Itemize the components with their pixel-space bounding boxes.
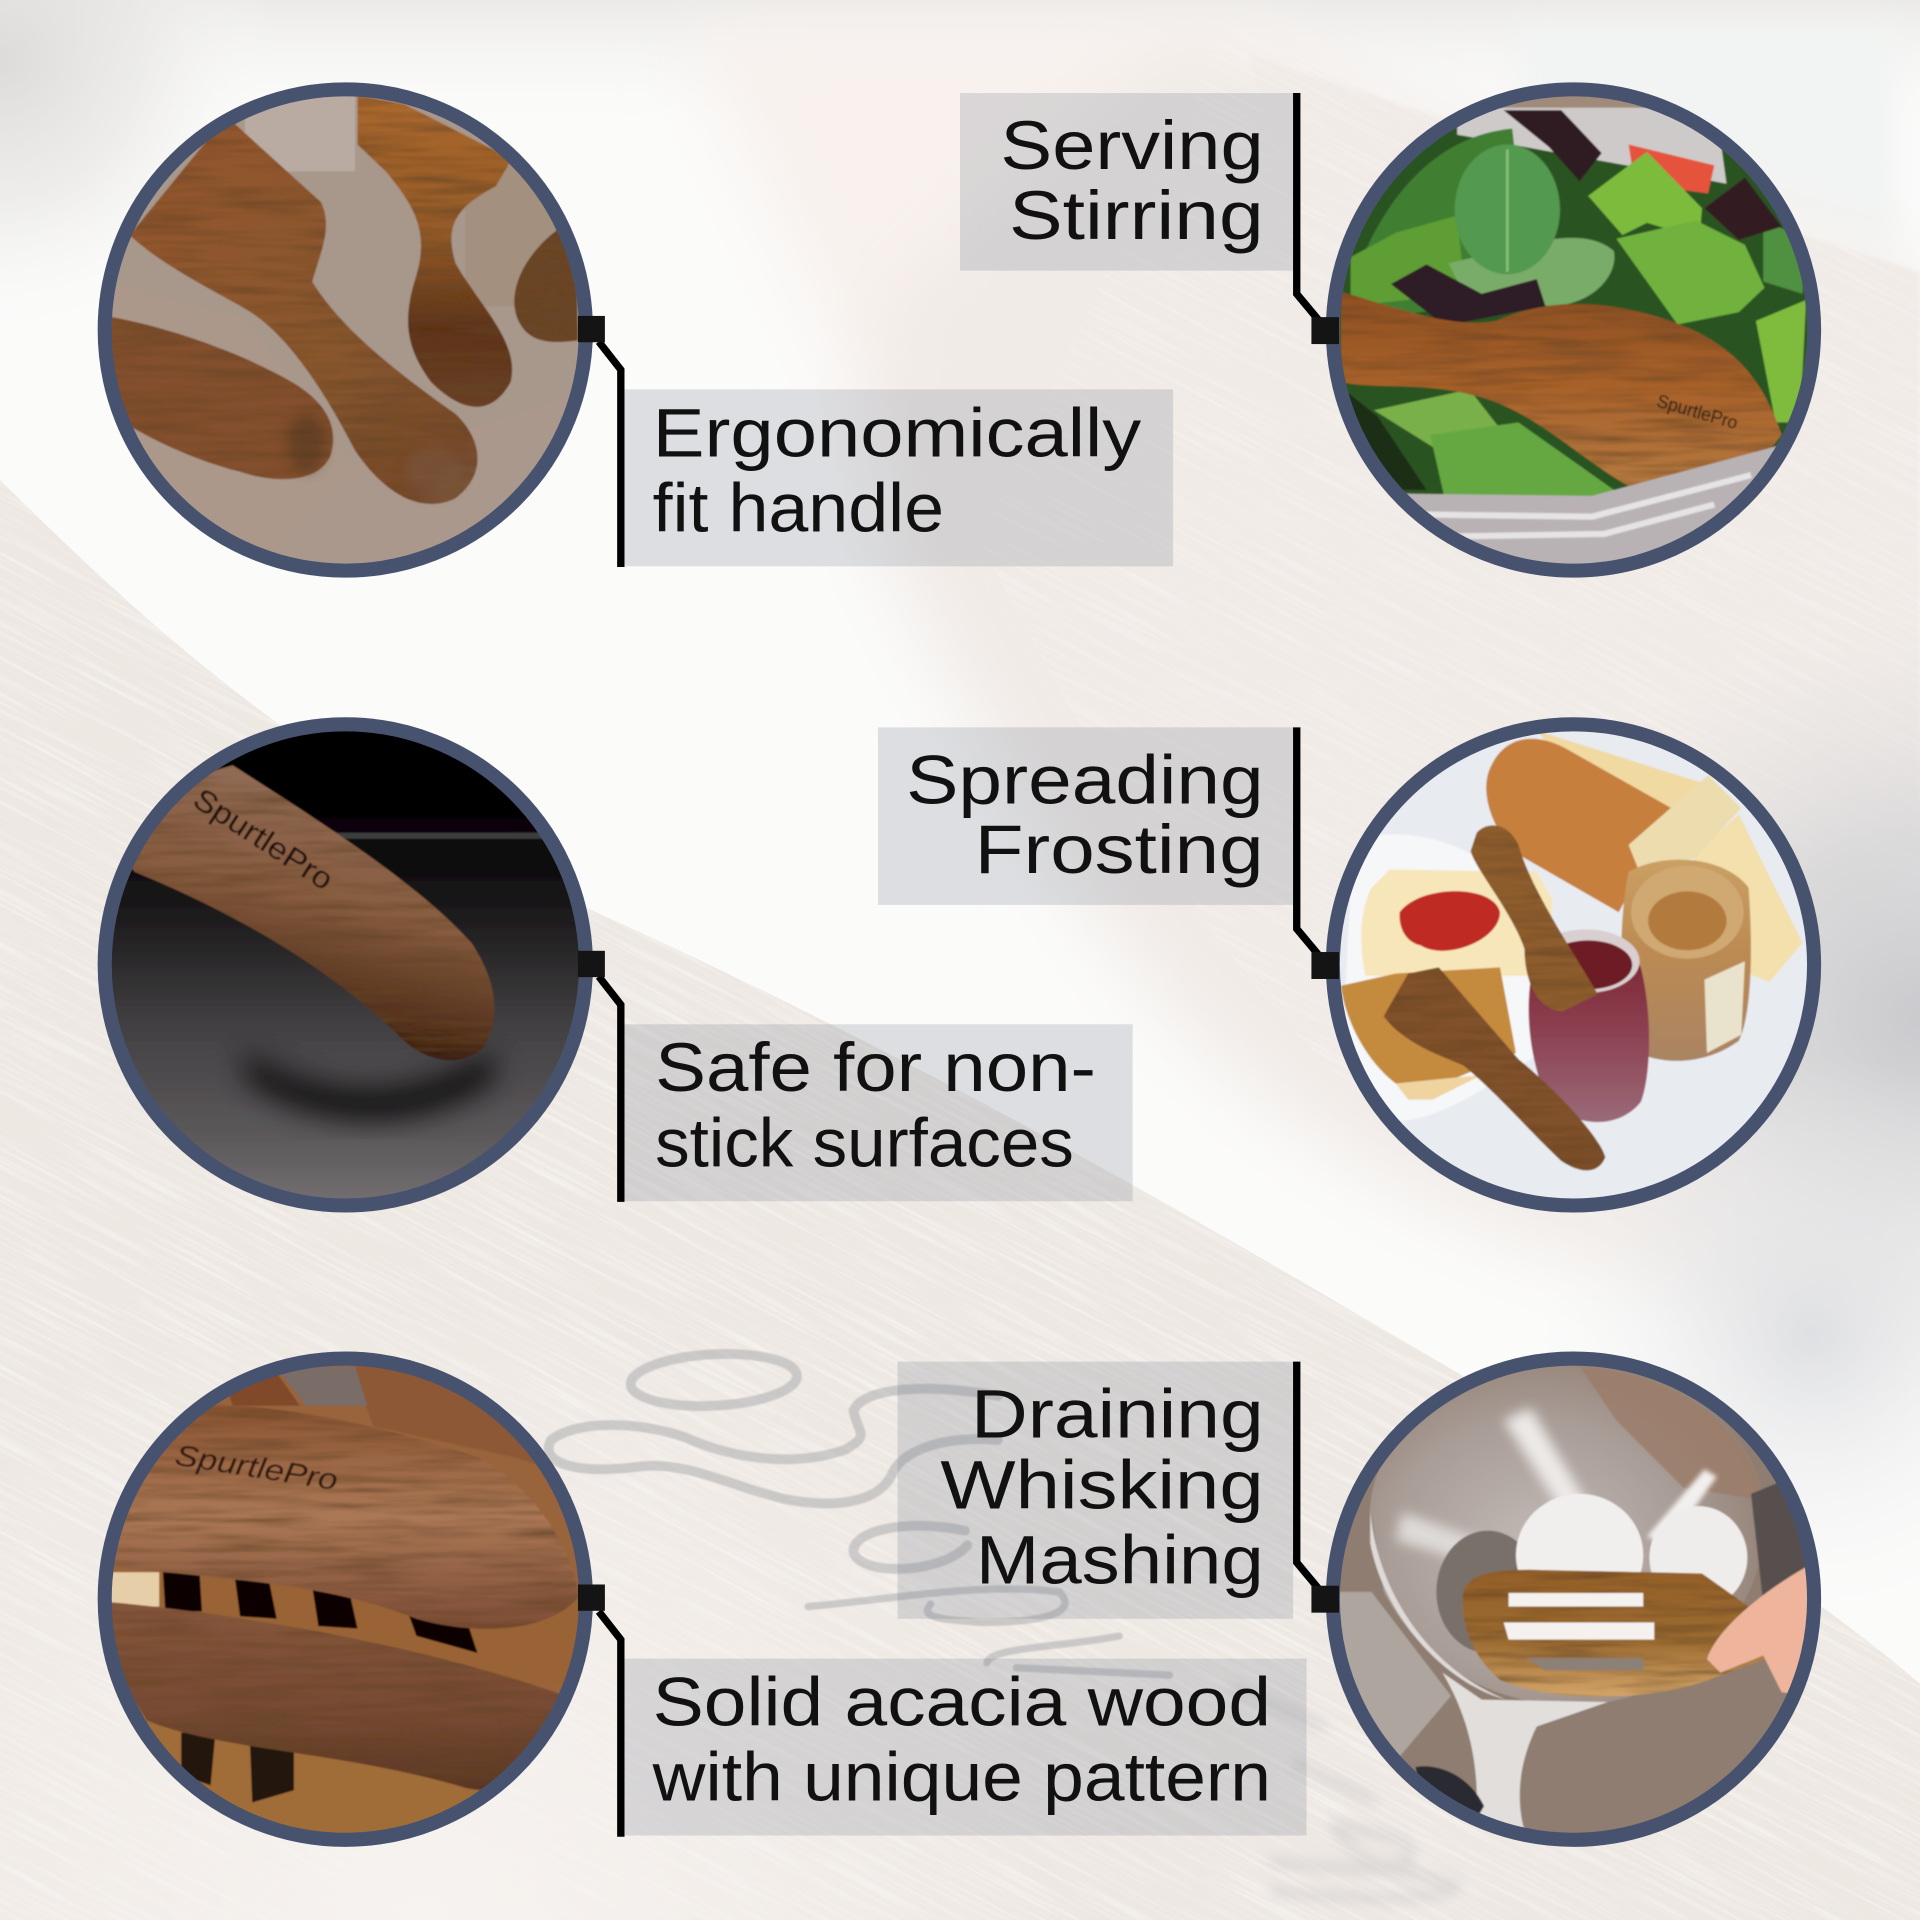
label box [898, 1362, 1293, 1619]
label box [878, 727, 1293, 905]
ring [105, 89, 586, 571]
label box [624, 1659, 1307, 1836]
ring [1333, 1359, 1814, 1840]
feature: serving and stirring [960, 86, 1824, 576]
connector [1297, 1362, 1339, 1613]
photo: wooden handles on table [112, 96, 578, 564]
connector [1297, 727, 1339, 979]
feature: safe for non-stick [104, 722, 1133, 1212]
label text: Ergonomically [653, 395, 1142, 472]
ring [105, 1359, 586, 1840]
connector [578, 316, 621, 567]
photo: stacked walnut spoons [104, 1359, 594, 1849]
label box [960, 93, 1293, 271]
label text: Safe for non- [655, 1029, 1096, 1106]
photo: spoon on salad [1335, 86, 1824, 576]
label text [653, 395, 1142, 546]
label text: Draining [971, 1376, 1264, 1453]
ring [105, 724, 586, 1206]
feature: draining, whisking, mashing [898, 1359, 1824, 1849]
label text: Whisking [940, 1447, 1264, 1524]
label text [906, 741, 1264, 888]
ring [1333, 724, 1814, 1206]
ring [1333, 89, 1814, 571]
connector [578, 1584, 621, 1837]
label text: Serving [1000, 107, 1264, 184]
background: blurred brand engraving [1237, 1690, 1457, 1898]
photo: draining eggs with slotted spoon [1335, 1359, 1824, 1849]
label box [624, 1024, 1133, 1201]
label text [655, 1029, 1096, 1181]
feature: solid acacia wood [104, 1359, 1307, 1849]
label text: Solid acacia wood [653, 1663, 1271, 1740]
background: faint logo watermark [549, 1350, 1169, 1675]
label text: fit handle [653, 469, 944, 546]
feature: spreading and frosting [878, 722, 1824, 1212]
label text [1000, 107, 1264, 254]
photo: spoon on salad: SpurtlePro [1654, 390, 1740, 433]
connector [578, 951, 621, 1202]
label text: Stirring [1009, 177, 1264, 254]
label text: Frosting [975, 811, 1264, 888]
photo: handle on dark pan [104, 722, 594, 1212]
label box [624, 389, 1173, 566]
photo: handle on dark pan: SpurtlePro [187, 782, 339, 897]
connector [1297, 93, 1339, 344]
feature: ergonomic handle [104, 86, 1173, 588]
label text: stick surfaces [655, 1104, 1074, 1181]
label text [652, 1663, 1271, 1816]
photo: stacked walnut spoons: SpurtlePro [173, 1439, 340, 1497]
photo: toast, jars and spreaders [1335, 722, 1824, 1212]
label text [940, 1376, 1264, 1598]
label text: with unique pattern [652, 1739, 1271, 1816]
label text: Mashing [976, 1521, 1264, 1598]
label text: Spreading [906, 741, 1264, 818]
